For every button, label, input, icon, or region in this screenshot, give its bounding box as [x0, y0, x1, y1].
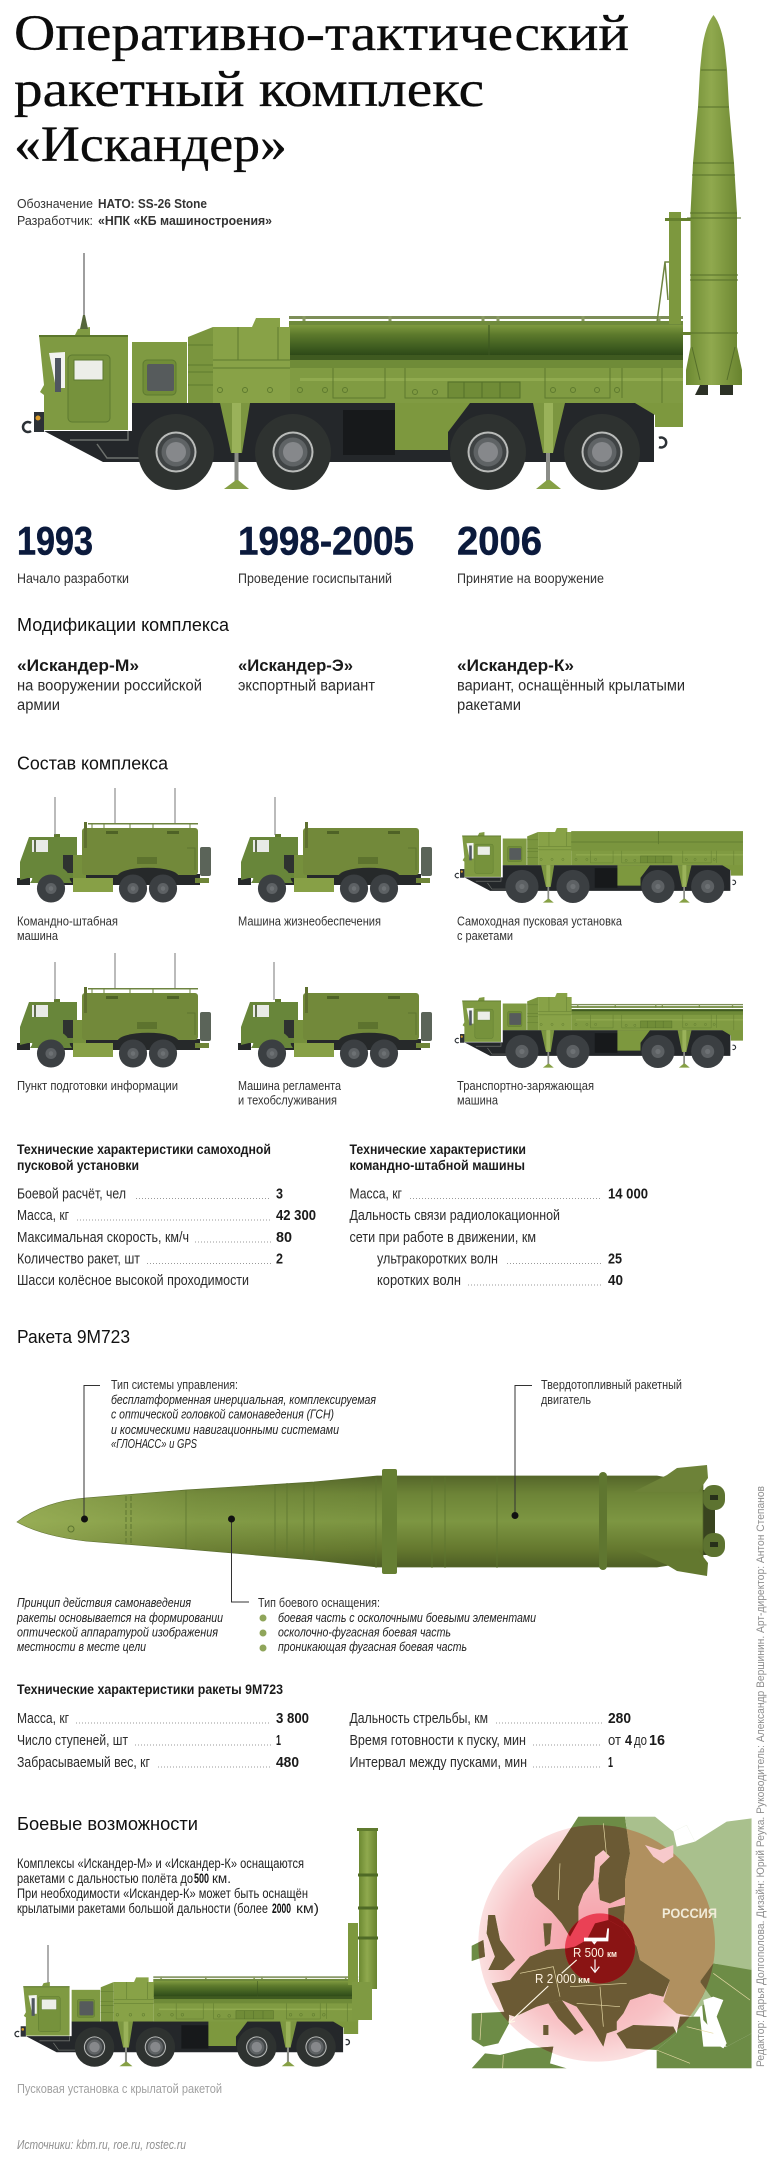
paragraph: ranges: крылатыми ракетами большой дальности (более — [17, 1901, 268, 1916]
specs: missile: 1 — [608, 1755, 613, 1771]
modification: Iskander-K: вариант, оснащённый крылатыми — [457, 678, 685, 694]
modification: Iskander-K: ракетами — [457, 697, 521, 714]
specs: command vehicle: Масса, кг — [350, 1186, 402, 1202]
subtitle: designation and developer: НАТО: SS-26 Stone — [98, 197, 207, 211]
map: strike ranges over Europe: РОССИЯ — [662, 1905, 717, 1921]
specs: launcher: 2 — [276, 1252, 283, 1268]
specs: command vehicle: командно-штабной машины — [350, 1158, 525, 1173]
specs: missile: 480 — [276, 1755, 299, 1771]
vehicle: transloader — [455, 993, 743, 1108]
vehicle: maintenance — [238, 962, 432, 1108]
vehicle: life support: Машина жизнеобеспечения — [238, 914, 381, 928]
title: ракетный комплекс — [14, 62, 484, 118]
callout: guidance system: Тип системы управления: — [111, 1378, 238, 1392]
specs: missile: 3 800 — [276, 1711, 309, 1727]
paragraph: ranges: 2000 — [272, 1901, 291, 1916]
specs: command vehicle: 14 000 — [608, 1186, 648, 1202]
modification: Iskander-M: на вооружении российской — [17, 678, 202, 694]
main launcher with ballistic missile — [23, 15, 742, 490]
specs: command vehicle: сети при работе в движении, км — [350, 1230, 536, 1246]
map: strike ranges over Europe: R 500 — [573, 1945, 604, 1960]
heading: missile: Ракета 9М723 — [17, 1326, 130, 1347]
note: homing principle: ракеты основывается на формировании — [16, 1611, 223, 1625]
timeline: 1993: Начало разработки — [17, 571, 129, 586]
callout: guidance system: с оптической головкой самонаведения (ГСН) — [111, 1408, 334, 1422]
heading: modifications: Модификации комплекса — [17, 614, 230, 635]
specs: command vehicle: Дальность связи радиолокационной — [350, 1208, 560, 1224]
specs: missile: 280 — [608, 1711, 631, 1727]
vehicle: information preparation post: Пункт подготовки информации — [17, 1079, 178, 1093]
specs: launcher: Боевой расчёт, чел — [17, 1186, 126, 1202]
specs: command vehicle: коротких волн — [377, 1273, 461, 1289]
title: Оперативно-тактический — [14, 6, 629, 62]
modification: Iskander-K — [457, 656, 685, 714]
specs: missile: Дальность стрельбы, км — [350, 1711, 488, 1727]
callout: solid fuel engine: двигатель — [541, 1393, 591, 1407]
callout: guidance system: «ГЛОНАСС» и GPS — [111, 1437, 198, 1451]
subtitle: designation and developer — [17, 197, 272, 228]
timeline: 2006: 2006 — [457, 520, 542, 564]
specs: missile — [17, 1682, 665, 1771]
vehicle: launcher with missiles: с ракетами — [457, 929, 513, 943]
specs: missile: от — [608, 1733, 621, 1749]
specs: launcher: Шасси колёсное высокой проходимости — [17, 1273, 249, 1289]
paragraph: ranges — [17, 1856, 319, 1916]
timeline: 2006 — [457, 520, 604, 586]
timeline: 1998-2005 — [238, 520, 414, 586]
specs: missile: Число ступеней, шт — [17, 1733, 128, 1749]
paragraph: ranges: При необходимости «Искандер-К» может быть оснащён — [17, 1886, 308, 1901]
vehicle: command and staff — [17, 788, 211, 943]
specs: missile: Масса, кг — [17, 1711, 69, 1727]
vehicle: launcher with missiles — [455, 828, 743, 943]
timeline: 1993: 1993 — [17, 520, 93, 564]
heading: composition: Состав комплекса — [17, 752, 169, 774]
note: homing principle: Принцип действия самонаведения — [17, 1596, 191, 1610]
specs: missile: 4 — [625, 1733, 632, 1749]
callout: warhead types: Тип боевого оснащения: — [258, 1596, 380, 1610]
callout: guidance system — [81, 1378, 376, 1522]
callout: warhead types: осколочно-фугасная боевая часть — [278, 1626, 451, 1640]
specs: missile: 16 — [649, 1733, 665, 1749]
specs: missile: Интервал между пусками, мин — [350, 1755, 527, 1771]
missile 9M723 illustration — [17, 1465, 725, 1576]
specs: launcher: Масса, кг — [17, 1208, 69, 1224]
modification: Iskander-K: «Искандер-К» — [457, 656, 574, 675]
specs: launcher: Технические характеристики самоходной — [17, 1142, 271, 1157]
map: strike ranges over Europe: км — [607, 1949, 617, 1959]
vehicle: information preparation post — [17, 953, 211, 1093]
subtitle: designation and developer: Разработчик: — [17, 214, 93, 228]
note: homing principle — [16, 1596, 223, 1654]
paragraph: ranges: ракетами с дальностью полёта до — [17, 1871, 193, 1886]
vehicle: maintenance: Машина регламента — [238, 1079, 341, 1093]
vehicle: command and staff: машина — [17, 929, 58, 943]
sources: Источники: kbm.ru, roe.ru, rostec.ru — [17, 2138, 186, 2152]
vehicle: command and staff: Командно-штабная — [17, 914, 118, 928]
vehicle: life support — [238, 797, 432, 928]
specs: launcher: Максимальная скорость, км/ч — [17, 1230, 189, 1246]
heading: combat capabilities: Боевые возможности — [17, 1813, 198, 1834]
note: homing principle: местности в месте цели — [17, 1640, 146, 1654]
modification: Iskander-M: «Искандер-М» — [17, 656, 139, 675]
modification: Iskander-M: армии — [17, 697, 60, 714]
timeline: 1998-2005: Проведение госиспытаний — [238, 571, 392, 586]
modification: Iskander-E — [238, 656, 375, 694]
subtitle: designation and developer: «НПК «КБ машиностроения» — [98, 214, 272, 228]
launcher with cruise missile tube — [15, 1828, 378, 2067]
paragraph: ranges: Комплексы «Искандер-М» и «Искандер-К» оснащаются — [17, 1856, 304, 1871]
specs: command vehicle: 25 — [608, 1252, 622, 1268]
title — [14, 6, 629, 173]
paragraph: ranges: 500 — [194, 1871, 209, 1886]
specs: launcher: Количество ракет, шт — [17, 1252, 140, 1268]
specs: command vehicle: ультракоротких волн — [377, 1252, 498, 1268]
modification: Iskander-E: «Искандер-Э» — [238, 656, 353, 675]
timeline: 1998-2005: 1998-2005 — [238, 520, 414, 564]
vehicle: transloader: Транспортно-заряжающая — [457, 1079, 594, 1093]
subtitle: designation and developer: Обозначение — [17, 197, 93, 211]
vehicle: maintenance: и техобслуживания — [238, 1094, 337, 1108]
specs: command vehicle: 40 — [608, 1273, 623, 1289]
map: strike ranges over Europe: км — [578, 1975, 590, 1985]
specs: missile: Технические характеристики ракеты 9М723 — [17, 1682, 283, 1697]
specs: missile: Время готовности к пуску, мин — [350, 1733, 526, 1749]
callout: guidance system: и космическими навигационными системами — [111, 1423, 339, 1437]
note: homing principle: оптической аппаратурой изображения — [17, 1626, 218, 1640]
specs: launcher: 42 300 — [276, 1208, 316, 1224]
credits (vertical): Редактор: Дарья Долгополова. Дизайн: Юрий Реука. Руководитель: Александр Вершинин. Арт-директор: Антон Степанов — [755, 1486, 767, 2067]
callout: warhead types: проникающая фугасная боевая часть — [278, 1640, 467, 1654]
specs: launcher: пусковой установки — [17, 1158, 139, 1173]
vehicle: launcher with missiles: Самоходная пусковая установка — [457, 914, 622, 928]
specs: missile: Забрасываемый вес, кг — [17, 1755, 150, 1771]
paragraph: ranges: км. — [212, 1871, 231, 1886]
specs: launcher: 80 — [276, 1230, 292, 1246]
timeline: 1993 — [17, 520, 129, 586]
specs: command vehicle — [350, 1142, 648, 1289]
modification: Iskander-M — [17, 656, 202, 714]
map: strike ranges over Europe — [470, 1817, 752, 2068]
paragraph: ranges: км) — [296, 1901, 319, 1916]
specs: missile: 1 — [276, 1733, 281, 1749]
specs: missile: до — [634, 1733, 647, 1749]
title: «Искандер» — [14, 117, 287, 173]
specs: command vehicle: Технические характеристики — [350, 1142, 526, 1157]
callout: warhead types: боевая часть с осколочными боевыми элементами — [278, 1611, 536, 1625]
modification: Iskander-E: экспортный вариант — [238, 678, 375, 694]
callout: solid fuel engine: Твердотопливный ракетный — [541, 1378, 682, 1392]
specs: launcher — [17, 1142, 316, 1289]
caption: launcher: Пусковая установка с крылатой ракетой — [17, 2081, 222, 2096]
specs: launcher: 3 — [276, 1186, 283, 1202]
callout: warhead types — [228, 1516, 536, 1654]
map: strike ranges over Europe: R 2 000 — [535, 1971, 576, 1986]
timeline: 2006: Принятие на вооружение — [457, 571, 604, 586]
callout: solid fuel engine — [512, 1378, 682, 1519]
callout: guidance system: бесплатформенная инерциальная, комплексируемая — [111, 1393, 376, 1407]
vehicle: transloader: машина — [457, 1094, 498, 1108]
